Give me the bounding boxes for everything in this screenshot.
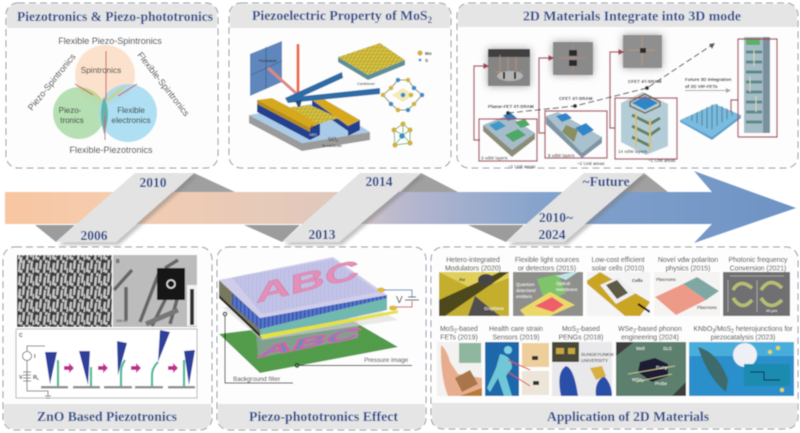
laser beams [268,44,298,95]
venn diagram: tronics [60,116,84,125]
item: WSe2 phonon engineering: Well [636,346,645,351]
image B TEM: 100 nm [116,319,128,323]
heading: 2 [428,15,432,25]
pillar device [219,254,398,339]
trigonal prism [391,121,413,148]
item: KNbO3/MoS2 heterojunctions: 2 [731,328,734,334]
item: flexible light sources: emitters [516,294,533,299]
callout: background filter: Background filter [233,376,280,383]
item: MoS2 PENGs: PENGs (2018) [559,334,603,342]
chip labels: Planar-FET 4T-SRAM [488,104,534,109]
item: polariton physics: physics (2015) [666,266,710,272]
callout: background filter [223,312,293,383]
chip labels: CFET 4T-SRAM [628,79,662,84]
item: solar cells: Cells [632,278,643,283]
heading [4,404,211,429]
callout: pressure image [295,357,412,367]
item: WSe2 phonon engineering [616,326,686,396]
panel: piezo-phototronics effect [217,247,426,430]
heading: Piezo-phototronics Effect [249,410,398,425]
item: hetero-integrated modulators [439,257,509,316]
item: health care strain sensors: Health care strain [489,326,543,333]
atom legend: S [425,58,428,63]
item: solar cells [585,257,650,316]
item: MoS2 PENGs: 2 [576,328,579,334]
chip labels [481,77,732,169]
pillar device: ABC [256,254,359,309]
planar FET chip [479,113,537,161]
device stack: HfO [309,132,317,137]
item: MoS2 PENGs: SUNGKYUNKW [581,352,615,357]
label 2010 to 2024: 2010~ [539,211,574,226]
lower folded triangles [35,225,524,242]
chip labels: ~1 Unit areas [648,158,676,163]
device stack: 2 [336,139,338,143]
chip labels: of 2D VIP-FETs [685,84,718,89]
tips [45,330,195,385]
image C bending sequence: C [19,333,23,339]
CFET chip [545,111,607,158]
item: KNbO3/MoS2 heterojunctions [689,326,794,396]
chip labels: ~2 Unit areas [577,161,605,166]
item: KNbO3/MoS2 heterojunctions: KNbO [693,326,712,333]
image C bending sequence: V [19,375,23,381]
item: MoS2 FETs [437,326,482,396]
panel: piezoelectric property of MoS2: Cantilever [357,81,376,86]
venn diagram [26,36,192,155]
item: hetero-integrated modulators: Modulators (2020) [445,266,501,272]
item: WSe2 phonon engineering: 2 [642,379,644,383]
item: WSe2 phonon engineering: Pump [656,365,668,370]
panel: piezoelectric property of MoS2 [229,3,451,168]
item: MoS2 FETs: FETs (2019) [440,334,478,342]
image B TEM: B [116,259,120,265]
item: WSe2 phonon engineering: Probe [655,381,668,386]
filter plate [222,307,398,340]
chip labels: ~1 Unit areas [508,164,536,169]
hexagonal lattice [381,78,424,112]
label future: ~Future [582,175,630,190]
heading: Piezoelectric Property of MoS [252,9,431,24]
voltage source [377,288,419,310]
chip labels: 6 vdW layers [548,153,575,158]
year 2014: 2014 [366,175,392,190]
connector arrows [474,50,623,140]
item: flexible light sources: Flexible light sources [515,257,580,264]
item: flexible light sources [513,257,583,316]
venn diagram: Flexible [117,106,145,115]
ribbon 2010-2024 to future: 2024 [538,228,566,243]
venn diagram: electronics [111,116,151,125]
heading [432,403,797,428]
item: flexible light sources: membrane [556,287,578,292]
item: health care strain sensors: Sensors (2019) [492,334,540,342]
green pressure image: ABC [255,323,365,362]
heading [218,404,425,429]
timeline arrow [5,171,796,245]
item: hetero-integrated modulators: Au [459,277,465,282]
cantilever [285,72,380,107]
magenta arrows [64,363,178,373]
stacked CFET chip [615,92,677,159]
image B TEM [113,255,197,327]
item: hetero-integrated modulators: Hetero-integrated [446,257,500,264]
image C bending sequence: L [37,377,40,381]
item: KNbO3/MoS2 heterojunctions: /MoS [715,326,732,333]
heading [458,4,797,27]
chip labels: CFET 4T-SRAM [559,96,593,101]
item: flexible light sources: Quantum [516,282,535,287]
image C bending sequence: R [33,375,37,381]
green pressure image [219,296,398,373]
item: WSe2 phonon engineering: WSe [632,377,642,382]
device stack [249,98,370,151]
item: WSe2 phonon engineering: WSe [618,326,633,333]
item: MoS2 FETs: -based [457,326,478,333]
item: flexible light sources: Optical [556,281,570,286]
item: WSe2 phonon engineering: engineering (2024) [621,334,679,342]
image C bending sequence [16,329,197,398]
item: WSe2 phonon engineering: -based phonon [636,326,682,333]
ribbon 2013 to 2014 [282,173,424,245]
year 2010: 2010 [140,176,166,191]
venn diagram: Spintronics [81,66,121,75]
venn diagram: Flexible Piezo-Spintronics [58,36,162,46]
item: photonic frequency conversion: 40 μm [766,308,778,313]
device stack: Si substrate [322,144,342,148]
heading: Piezotronics & Piezo-phototronics [17,10,214,25]
chip labels: 3 vdW layers [481,156,508,160]
panel: 2D materials integrate into 3D mode [457,3,798,169]
venn diagram: Piezo- [59,106,82,115]
item: KNbO3/MoS2 heterojunctions: 3 [712,328,715,334]
item: polariton physics: Plasmons [697,305,718,310]
item: MoS2 FETs: 2 [454,328,457,334]
venn diagram: Flexible-Spintronics [135,50,192,119]
SEM images [488,35,662,86]
year 2013: 2013 [308,228,336,243]
venn diagram: Flexible-Piezotronics [69,145,153,155]
MoS2 sheet [338,43,405,80]
device stack: Au [310,124,316,129]
item: flexible light sources: or detectors (2015) [518,266,576,272]
heading: ZnO Based Piezotronics [37,410,178,425]
panel: ZnO based piezotronics [3,247,212,430]
item: photonic frequency conversion: Conversion (2021) [730,266,786,272]
panel: piezotronics and piezo-phototronics [6,3,218,168]
voltage source: V [396,295,403,306]
item: MoS2 PENGs: UNIVERSITY [581,358,608,363]
item: MoS2 FETs: MoS [440,326,454,333]
item: photonic frequency conversion: Photonic frequency [728,257,788,264]
vertical 3D tower [731,37,777,137]
item: WSe2 phonon engineering: SLG [663,346,673,351]
nanowires [58,360,184,386]
item: polariton physics: Plasmons [656,277,677,282]
atom legend [417,50,432,63]
item: MoS2 PENGs [552,326,615,396]
item: hetero-integrated modulators: Graphene [484,306,505,311]
dashed trend arrow [506,43,715,115]
item: solar cells: Low-cost efficient [591,257,645,264]
image C bending sequence: I [34,354,36,360]
chip labels: 14 vdW layers [618,149,648,154]
upper folded triangles [174,173,668,192]
item: KNbO3/MoS2 heterojunctions: heterojunctions for [734,326,793,333]
photodetector [250,41,282,96]
substrate bars [41,386,195,388]
gray arrow [685,88,731,93]
item: MoS2 PENGs: -based [579,326,600,333]
item: flexible light sources: detectors/ [516,288,537,293]
device stack: SiO [328,137,336,143]
circuit [22,346,51,398]
item: polariton physics: Novel vdw polariton [658,257,718,264]
arrow body [5,171,796,243]
heading [230,4,450,28]
heading [7,4,217,28]
item: solar cells: solar cells (2010) [592,266,644,272]
gold electrodes [257,98,360,140]
image A nanorods [17,255,112,327]
image A nanorods: A [19,259,23,265]
item: polariton physics [654,257,720,316]
nanopillar array [680,103,741,140]
atom legend: Mo [425,51,432,56]
heading: 2D Materials Integrate into 3D mode [523,10,741,24]
chip labels: Future 3D integration [685,77,732,82]
photodetector: Photodiode [259,59,277,63]
item: WSe2 phonon engineering: 2 [633,328,636,334]
callout: pressure image: Pressure image [364,357,409,364]
ribbon 2006 to 2010 [56,173,197,245]
item: MoS2 PENGs: MoS [562,326,576,333]
year 2006: 2006 [80,229,108,244]
panel: application of 2D materials [431,247,798,429]
item: KNbO3/MoS2 heterojunctions: piezocatalysis (2023) [711,334,775,342]
venn diagram: Piezo-Spintronics [26,51,78,112]
item: photonic frequency conversion [723,257,790,316]
ribbon 2010-2024 to future [506,173,647,245]
heading: Application of 2D Materials [547,410,710,425]
item: health care strain sensors [485,326,549,396]
